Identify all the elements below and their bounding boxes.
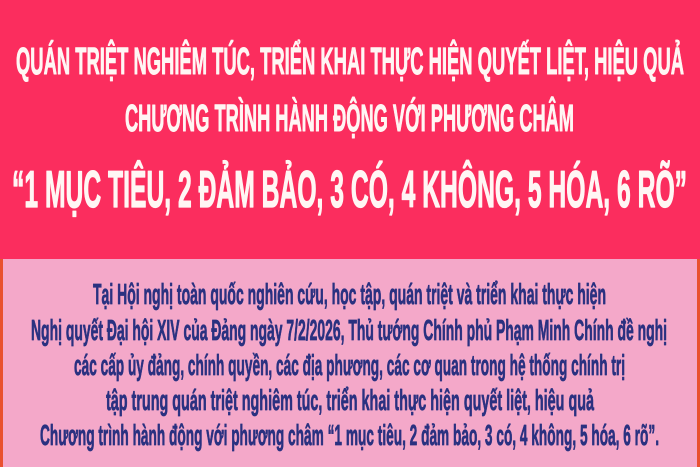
panel: pink body [0,259,700,467]
panel: red header [0,0,700,259]
